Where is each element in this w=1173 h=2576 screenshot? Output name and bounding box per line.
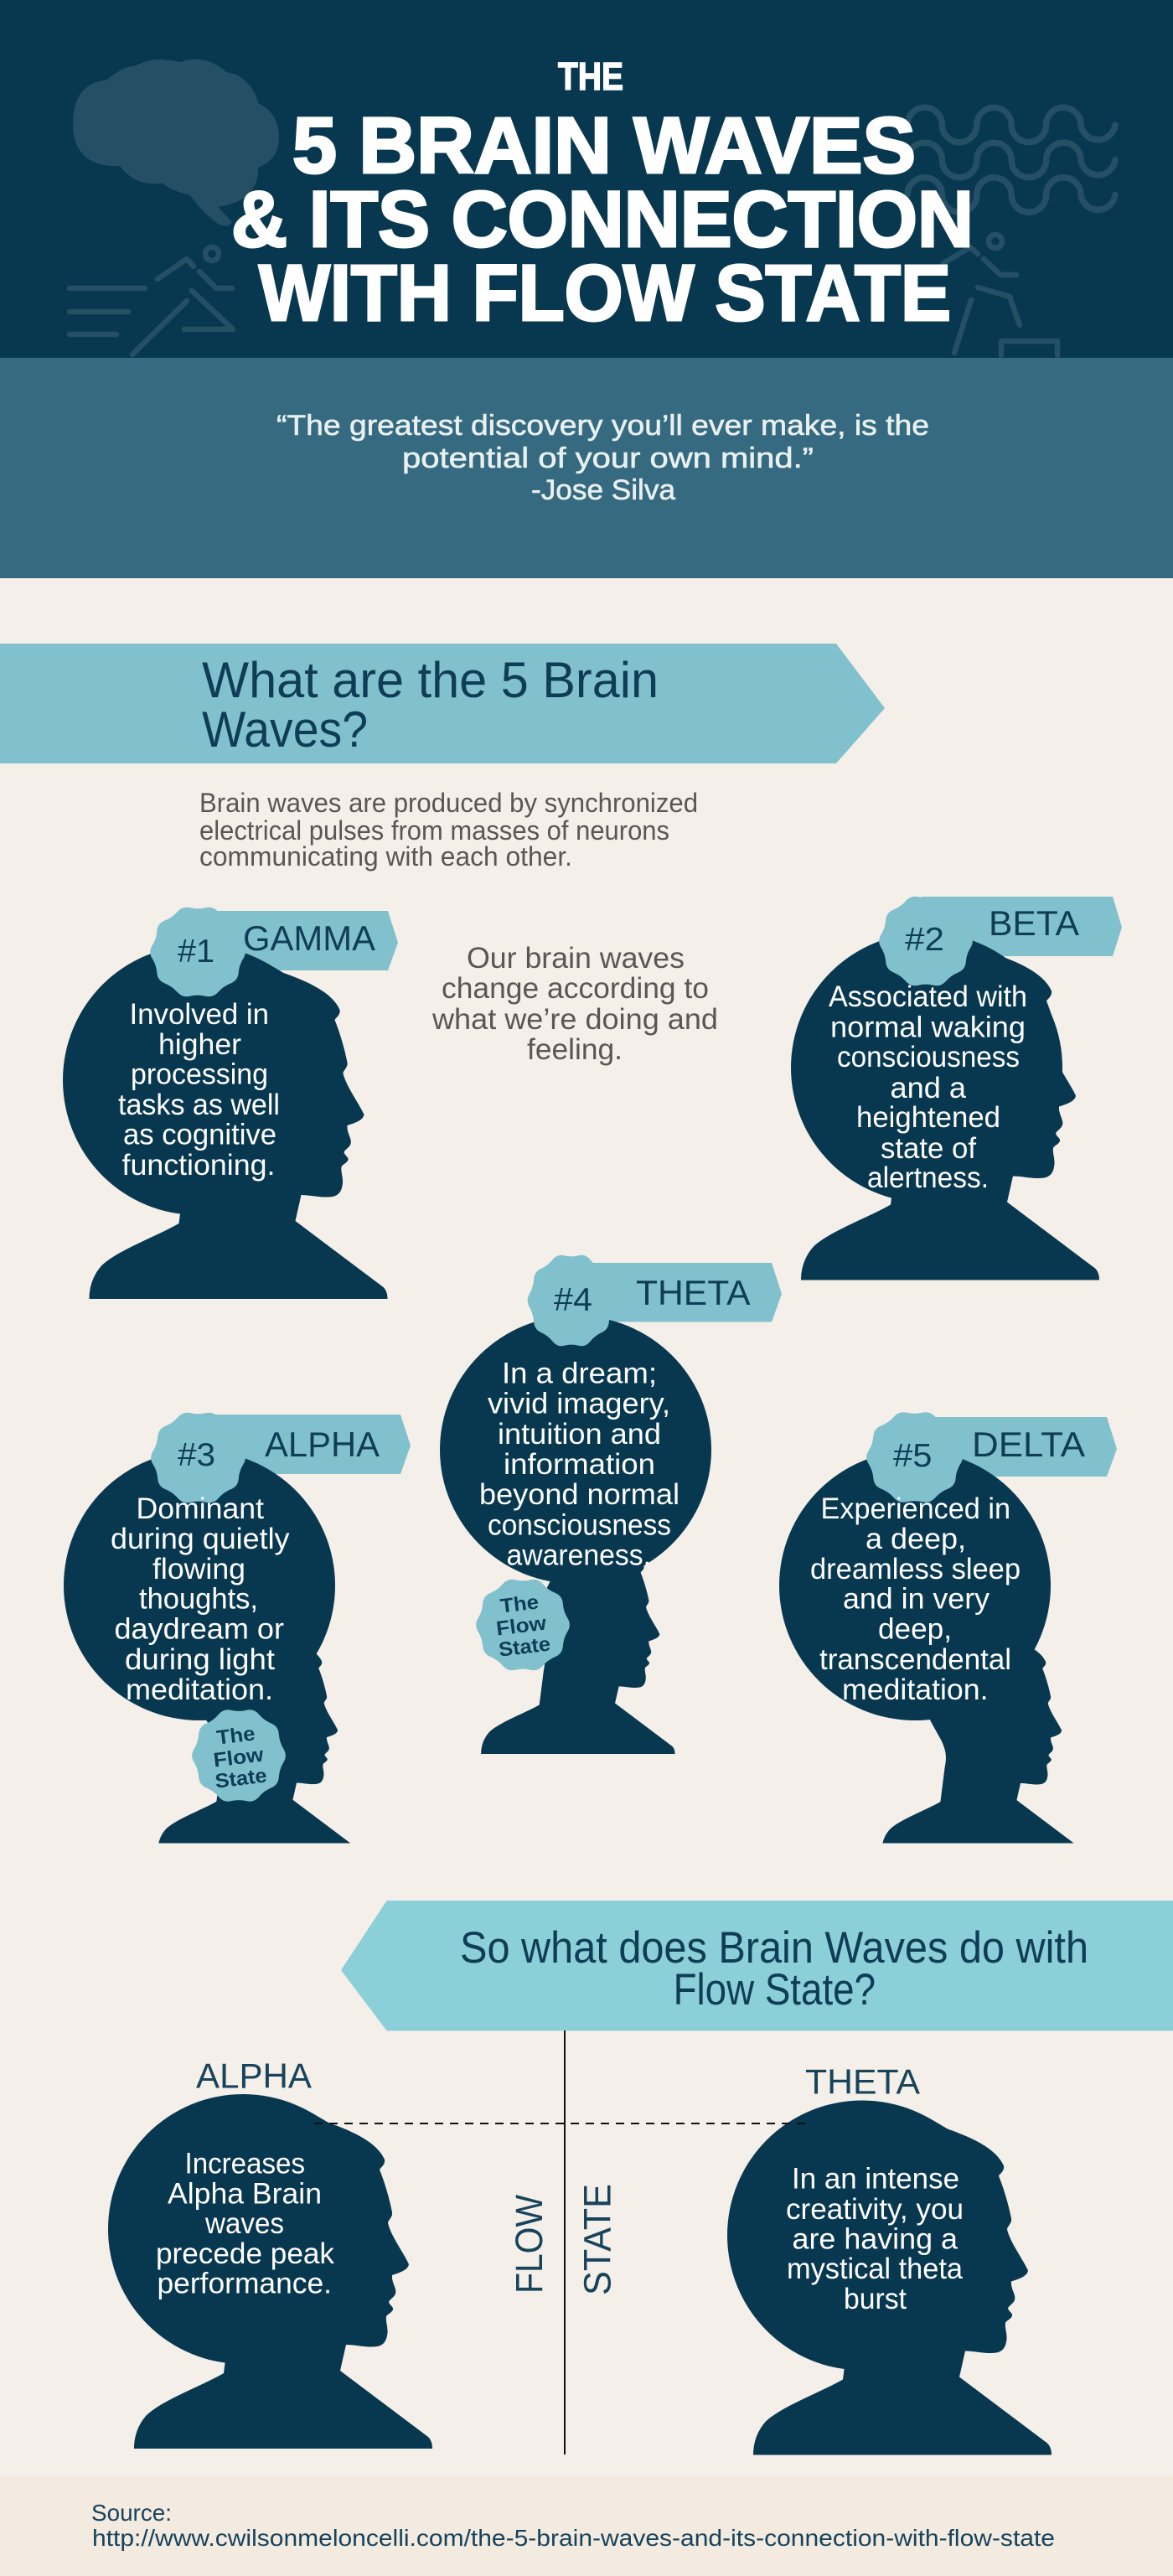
heading text bbox=[460, 1923, 1088, 2015]
number: #1: #1 bbox=[178, 934, 214, 970]
label banner: delta bbox=[922, 1417, 1117, 1477]
description: gamma: processing bbox=[131, 1058, 268, 1091]
description: theta: In a dream; bbox=[502, 1358, 657, 1389]
intro text: Brain waves are produced by synchronized bbox=[199, 788, 698, 818]
source text: Source: bbox=[91, 2500, 172, 2526]
description: theta flow: creativity, you bbox=[786, 2193, 964, 2226]
badge: the flow state (alpha) bbox=[192, 1710, 286, 1802]
description: alpha: during light bbox=[125, 1643, 275, 1676]
title: THE bbox=[558, 54, 623, 98]
head silhouette: alpha flow bbox=[108, 2094, 432, 2449]
description: theta: intuition and bbox=[498, 1418, 661, 1451]
description: theta: beyond normal bbox=[479, 1478, 680, 1511]
description: alpha flow: waves bbox=[204, 2207, 284, 2240]
description: beta bbox=[829, 980, 1027, 1194]
label: BETA: BETA bbox=[989, 903, 1079, 943]
icon: brain thought bubble bbox=[73, 59, 279, 226]
description: alpha flow: precede peak bbox=[156, 2237, 334, 2270]
description: beta: and a bbox=[890, 1072, 967, 1104]
description: alpha: during quietly bbox=[111, 1523, 290, 1555]
number: #3: #3 bbox=[178, 1437, 215, 1473]
panel: alpha bbox=[64, 1413, 411, 1851]
intro text: electrical pulses from masses of neurons bbox=[199, 815, 669, 846]
center note text: Our brain waves bbox=[467, 942, 685, 975]
description: theta flow: burst bbox=[844, 2283, 907, 2315]
label: ALPHA: ALPHA bbox=[265, 1425, 380, 1464]
label: THETA: THETA bbox=[805, 2062, 920, 2102]
badge: #1 bbox=[150, 908, 245, 996]
description: gamma: as cognitive bbox=[123, 1118, 276, 1151]
description: delta bbox=[810, 1492, 1021, 1706]
label banner: alpha bbox=[201, 1415, 411, 1474]
head silhouette: alpha bbox=[64, 1451, 353, 1851]
head silhouette: theta bbox=[440, 1316, 711, 1754]
description: beta: consciousness bbox=[837, 1041, 1020, 1073]
badge: the flow state (alpha): State bbox=[214, 1764, 268, 1793]
description: gamma bbox=[118, 998, 280, 1182]
badge: the flow state (alpha): Flow bbox=[212, 1743, 265, 1772]
description: theta flow: are having a bbox=[793, 2222, 959, 2256]
icon: right runner on block bbox=[943, 235, 1057, 355]
heading text: Flow State? bbox=[674, 1965, 876, 2015]
description: beta: Associated with bbox=[829, 980, 1027, 1013]
description: beta: normal waking bbox=[830, 1011, 1026, 1044]
description: alpha: thoughts, bbox=[139, 1582, 258, 1616]
description: gamma: functioning. bbox=[122, 1149, 275, 1182]
icon: left runner with speed lines bbox=[70, 247, 233, 354]
description: theta: consciousness bbox=[488, 1508, 671, 1542]
description: theta: vivid imagery, bbox=[488, 1388, 670, 1420]
description: delta: and in very bbox=[843, 1582, 990, 1616]
badge: #5 bbox=[866, 1412, 963, 1503]
description: alpha: meditation. bbox=[126, 1673, 273, 1706]
description: alpha flow: Alpha Brain bbox=[168, 2177, 322, 2210]
rotated label: STATE: STATE bbox=[576, 2184, 619, 2295]
description: beta: heightened bbox=[856, 1101, 1000, 1134]
center note text: feeling. bbox=[527, 1033, 623, 1066]
badge: the flow state (alpha): The bbox=[215, 1722, 256, 1750]
description: theta flow: mystical theta bbox=[787, 2253, 964, 2285]
head silhouette: delta bbox=[779, 1451, 1077, 1851]
panel: header bbox=[0, 0, 1173, 358]
label banner: theta bbox=[586, 1263, 782, 1322]
description: alpha: flowing bbox=[152, 1553, 245, 1585]
description: gamma: Involved in bbox=[129, 998, 269, 1031]
panel: quote band bbox=[0, 358, 1173, 578]
badge: the flow state (theta) bbox=[476, 1580, 570, 1670]
source text bbox=[91, 2500, 1055, 2551]
label: GAMMA: GAMMA bbox=[243, 918, 375, 958]
quote text bbox=[276, 410, 929, 506]
badge: #3 bbox=[151, 1413, 245, 1503]
center note text: what we’re doing and bbox=[431, 1003, 718, 1036]
head silhouette: beta bbox=[791, 926, 1099, 1280]
badge: #4 bbox=[528, 1255, 615, 1346]
panel: theta bbox=[440, 1255, 782, 1754]
description: theta flow: In an intense bbox=[792, 2162, 959, 2196]
vertical divider and dashed connector bbox=[314, 2030, 810, 2454]
label: THETA: THETA bbox=[636, 1273, 751, 1312]
intro text bbox=[199, 788, 698, 872]
description: alpha flow: performance. bbox=[158, 2268, 332, 2300]
title: WITH FLOW STATE bbox=[259, 249, 951, 338]
source text: http://www.cwilsonmeloncelli.com/the-5-brain-waves-and-its-connection-with-flow-state bbox=[92, 2525, 1055, 2551]
heading text: Waves? bbox=[202, 701, 368, 758]
description: alpha: Dominant bbox=[136, 1492, 264, 1525]
heading text bbox=[202, 652, 659, 758]
center note text: change according to bbox=[442, 972, 709, 1005]
label: DELTA: DELTA bbox=[972, 1425, 1085, 1464]
heading text: What are the 5 Brain bbox=[202, 652, 659, 708]
badge: the flow state (theta): The bbox=[499, 1591, 540, 1618]
panel: gamma bbox=[63, 908, 398, 1299]
description: delta: transcendental bbox=[819, 1643, 1011, 1676]
description: alpha flow bbox=[156, 2148, 334, 2300]
panel: delta bbox=[779, 1412, 1117, 1851]
badge: the flow state (theta): State bbox=[498, 1632, 552, 1662]
section heading arrow: So what does Brain Waves do with Flow State bbox=[341, 1901, 1173, 2030]
description: theta: information bbox=[504, 1448, 655, 1481]
badge: #2 bbox=[879, 897, 973, 985]
description: alpha: daydream or bbox=[114, 1612, 284, 1646]
description: delta: a deep, bbox=[866, 1523, 966, 1555]
icon: brain wave lines bbox=[907, 107, 1115, 212]
heading text: So what does Brain Waves do with bbox=[460, 1923, 1088, 1973]
badge: the flow state (theta): Flow bbox=[495, 1611, 548, 1641]
section heading arrow: What are the 5 Brain Waves bbox=[0, 644, 885, 763]
title: 5 BRAIN WAVES bbox=[292, 101, 916, 190]
title: & ITS CONNECTION bbox=[231, 175, 974, 264]
panel: source footer bbox=[0, 2476, 1173, 2576]
panel: alpha flow head bbox=[108, 2056, 432, 2449]
description: delta: deep, bbox=[878, 1612, 952, 1646]
description: theta flow bbox=[786, 2162, 964, 2315]
panel: theta flow head bbox=[727, 2062, 1052, 2455]
quote text: -Jose Silva bbox=[531, 474, 675, 506]
description: gamma: tasks as well bbox=[118, 1089, 280, 1121]
description: delta: Experienced in bbox=[821, 1492, 1010, 1525]
head silhouette: theta flow bbox=[727, 2100, 1052, 2455]
quote text: potential of your own mind.” bbox=[402, 442, 814, 474]
panel: beta bbox=[791, 897, 1122, 1280]
number: #4: #4 bbox=[554, 1282, 592, 1318]
description: delta: dreamless sleep bbox=[810, 1553, 1021, 1585]
description: theta: awareness. bbox=[506, 1539, 651, 1572]
number: #5: #5 bbox=[893, 1438, 932, 1474]
label banner: gamma bbox=[201, 911, 398, 970]
description: delta: meditation. bbox=[842, 1673, 989, 1706]
number: #2: #2 bbox=[905, 922, 944, 958]
quote text: “The greatest discovery you’ll ever make, is the bbox=[276, 410, 929, 442]
intro text: communicating with each other. bbox=[199, 841, 572, 872]
title bbox=[231, 54, 974, 338]
description: alpha bbox=[111, 1492, 290, 1706]
description: beta: state of bbox=[881, 1132, 976, 1165]
description: theta bbox=[479, 1358, 680, 1572]
center note text bbox=[431, 942, 718, 1066]
rotated label: FLOW: FLOW bbox=[508, 2195, 550, 2294]
label banner: beta bbox=[922, 897, 1122, 956]
description: beta: alertness. bbox=[867, 1161, 989, 1194]
head silhouette: gamma bbox=[63, 945, 387, 1299]
description: alpha flow: Increases bbox=[184, 2148, 305, 2180]
description: gamma: higher bbox=[158, 1028, 241, 1061]
label: ALPHA: ALPHA bbox=[196, 2056, 312, 2096]
